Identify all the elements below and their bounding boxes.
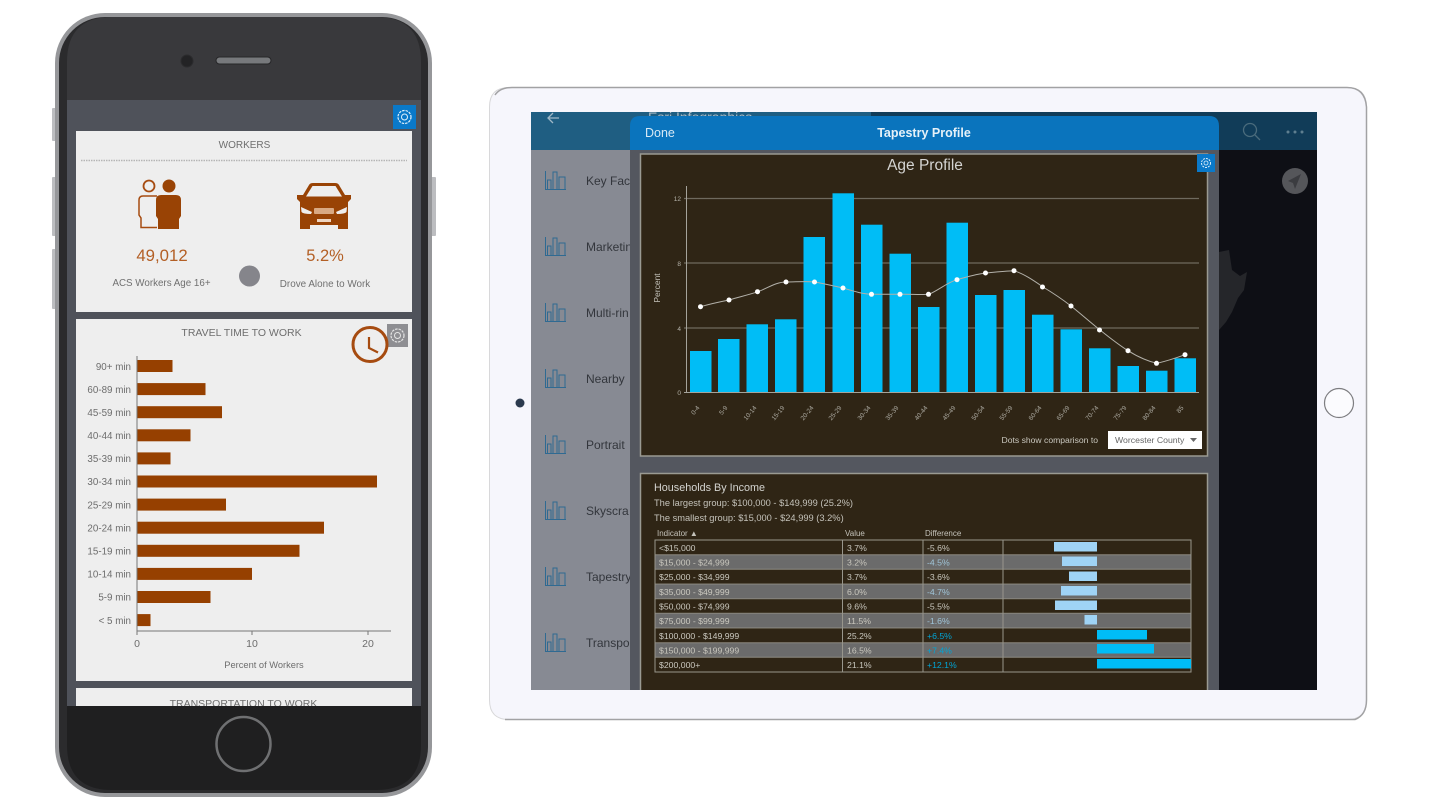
stat: drove alone: 5.2%	[306, 247, 344, 265]
income table: $75,000 - $99,999	[659, 616, 730, 626]
workers heading: WORKERS	[219, 140, 271, 151]
tablet screen	[531, 109, 1317, 690]
bar chart: travel time: 20-24 min	[87, 524, 131, 534]
income table: -1.6%	[927, 616, 950, 626]
sidebar labels: Portrait	[586, 438, 625, 452]
column chart: age profile: 45-49	[941, 404, 958, 422]
tablet device	[489, 87, 1367, 720]
sidebar labels: Key Fac	[586, 174, 630, 188]
modal: tapestry profile	[630, 116, 1219, 690]
bar chart: travel time: 10-14 min	[87, 570, 131, 580]
gear button	[1197, 154, 1215, 172]
income table: +12.1%	[927, 660, 957, 670]
sidebar labels: Nearby	[586, 372, 625, 386]
comparison line	[698, 268, 1188, 366]
camera	[181, 55, 193, 67]
income table: 3.7%	[847, 572, 867, 582]
comparison selector	[1002, 431, 1202, 449]
bar chart: travel time: < 5 min	[99, 616, 131, 627]
column chart: age profile: 0-4	[690, 405, 702, 416]
income table: $100,000 - $149,999	[659, 631, 739, 641]
income table: 3.7%	[847, 543, 867, 553]
page title behind modal: Esri Infographics	[648, 109, 752, 125]
location button	[1282, 168, 1308, 194]
income table: -5.6%	[927, 543, 950, 553]
bar chart: travel time: 60-89 min	[87, 385, 131, 396]
column chart: age profile	[652, 186, 1199, 422]
column chart: age profile: 80-84	[1141, 404, 1158, 422]
income table: <$15,000	[659, 543, 696, 553]
column chart: age profile: 10-14	[742, 404, 759, 422]
column chart: age profile: 5-9	[718, 405, 730, 416]
column chart: age profile: 85	[1176, 404, 1186, 415]
column chart: age profile: 35-39	[884, 404, 901, 422]
panel: transportation to work	[76, 688, 412, 710]
income table: +6.5%	[927, 631, 952, 641]
income table: $150,000 - $199,999	[659, 646, 739, 656]
comparison selector: Worcester County	[1115, 435, 1185, 445]
sidebar labels: Multi-rin	[586, 306, 629, 320]
income table: $35,000 - $49,999	[659, 587, 730, 597]
column chart: age profile: 0	[677, 390, 681, 397]
gear button grey	[387, 324, 408, 347]
income table: 25.2%	[847, 631, 872, 641]
income table: $200,000+	[659, 660, 700, 670]
column chart: age profile: 70-74	[1084, 404, 1101, 422]
income table: 11.5%	[847, 616, 871, 626]
income table: $25,000 - $34,999	[659, 572, 730, 582]
column chart: age profile: 60-64	[1027, 404, 1044, 422]
bar chart: travel time: 90+ min	[96, 362, 131, 373]
map shape	[1219, 250, 1247, 330]
bar chart: travel time: 5-9 min	[98, 592, 131, 604]
sidebar	[531, 109, 1317, 690]
phone screen	[67, 100, 421, 710]
column chart: age profile: 4	[677, 326, 681, 333]
column chart: age profile: 40-44	[913, 404, 930, 422]
touch indicator	[239, 266, 260, 286]
sidebar labels	[586, 174, 632, 650]
phone body	[55, 13, 432, 797]
column chart: age profile: 75-79	[1112, 404, 1129, 422]
tablet body	[489, 87, 1367, 720]
sidebar labels: Transpo	[586, 636, 630, 650]
back arrow	[548, 113, 559, 123]
done button: Done	[645, 126, 675, 140]
tablet home button	[1324, 388, 1354, 418]
y-axis label: Percent	[652, 273, 662, 303]
column chart: age profile: 8	[677, 261, 681, 268]
panel: transportation to work: TRANSPORTATION TO WORK	[170, 698, 317, 710]
smallest group: The smallest group: $15,000 - $24,999 (3.2%)	[654, 513, 844, 523]
bar chart: travel time: Percent of Workers	[224, 660, 304, 670]
column chart: age profile: 15-19	[770, 404, 787, 422]
income table: 9.6%	[847, 602, 867, 612]
column chart: age profile: 50-54	[970, 404, 987, 422]
income table: Indicator ▲	[657, 529, 698, 538]
icon: car	[297, 183, 351, 229]
column chart: age profile: 55-59	[998, 404, 1015, 422]
bar chart: travel time: 35-39 min	[87, 454, 131, 465]
label: drove alone: Drove Alone to Work	[280, 279, 370, 290]
bar chart: travel time: 40-44 min	[87, 431, 131, 442]
icon: clock	[353, 328, 387, 362]
icon: people	[139, 180, 181, 229]
home button	[216, 717, 270, 771]
panel: households by income	[640, 474, 1208, 690]
sidebar labels: Skyscra	[586, 504, 629, 518]
label: workers: ACS Workers Age 16+	[112, 278, 211, 289]
sidebar labels: Marketin	[586, 240, 632, 254]
column chart: age profile: 20-24	[799, 404, 816, 422]
income table: Difference	[925, 529, 962, 538]
column chart: age profile: 12	[674, 196, 681, 203]
bar chart: travel time: 15-19 min	[87, 546, 131, 558]
income table: -4.7%	[927, 587, 950, 597]
bar chart: travel time: 20	[362, 638, 374, 650]
age heading: Age Profile	[887, 157, 963, 174]
income table: -4.5%	[927, 558, 950, 568]
sidebar labels: Tapestry	[586, 570, 631, 584]
more dots	[1286, 130, 1304, 134]
phone device	[52, 13, 436, 797]
bar chart: travel time: 10	[246, 638, 258, 650]
travel heading: TRAVEL TIME TO WORK	[181, 327, 302, 339]
bar chart: travel time: 25-29 min	[87, 500, 131, 512]
largest group: The largest group: $100,000 - $149,999 (25.2%)	[654, 498, 853, 508]
bar chart: travel time: 30-34 min	[87, 477, 131, 488]
panel: travel time to work	[76, 319, 412, 681]
phone side buttons	[52, 108, 436, 309]
income table: -3.6%	[927, 572, 950, 582]
income table: 16.5%	[847, 646, 872, 656]
income table: 6.0%	[847, 587, 867, 597]
gear button blue	[393, 105, 416, 129]
bar chart: travel time: 0	[134, 638, 140, 650]
income table: 3.2%	[847, 558, 867, 568]
column chart: age profile: 30-34	[856, 404, 873, 422]
households heading: Households By Income	[654, 482, 765, 494]
income table	[655, 529, 1191, 672]
bar chart: travel time	[87, 356, 391, 670]
comparison selector: Dots show comparison to	[1002, 435, 1098, 445]
modal title: Tapestry Profile	[877, 126, 971, 140]
search icon	[1244, 124, 1260, 140]
stat: workers count: 49,012	[136, 246, 188, 265]
column chart: age profile: 25-29	[827, 404, 844, 422]
sidebar icons	[546, 171, 566, 652]
panel: workers	[76, 131, 412, 312]
panel: age profile	[640, 154, 1215, 456]
income table: 21.1%	[847, 660, 872, 670]
income table: +7.4%	[927, 646, 952, 656]
income table: -5.5%	[927, 602, 950, 612]
column chart: age profile: 65-69	[1055, 404, 1072, 422]
income table: $50,000 - $74,999	[659, 602, 730, 612]
speaker	[216, 57, 271, 64]
tablet camera	[516, 398, 524, 408]
income table: $15,000 - $24,999	[659, 558, 730, 568]
bar chart: travel time: 45-59 min	[87, 408, 131, 419]
income table: Value	[845, 529, 865, 538]
